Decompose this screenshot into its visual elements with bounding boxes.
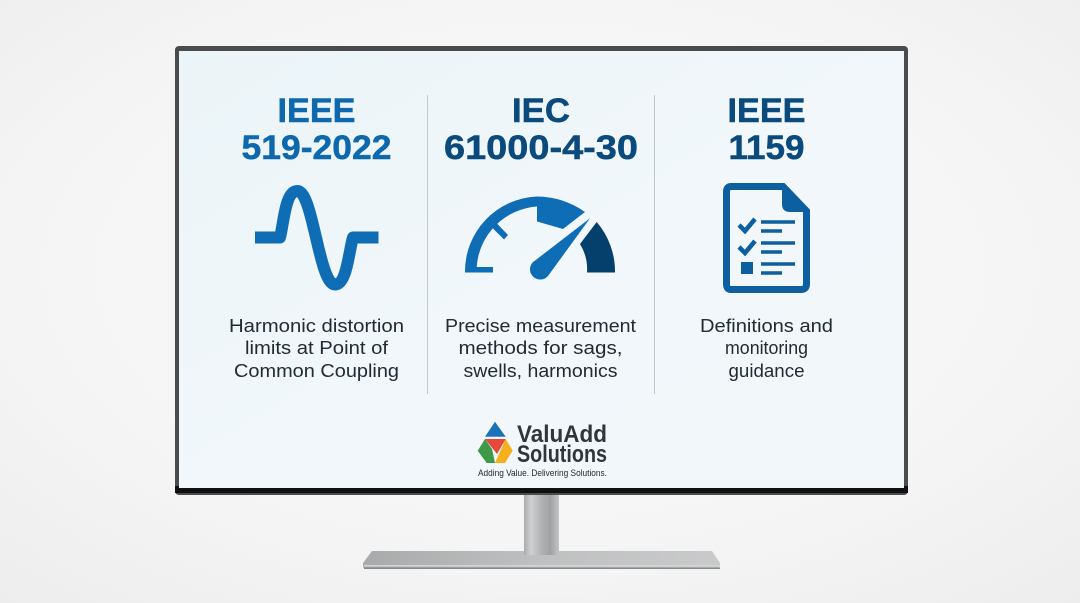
logo mark xyxy=(478,422,513,463)
description: measurement methods: methods for sags, xyxy=(458,337,622,358)
heading: IEC 61000-4-30: IEC xyxy=(512,92,570,130)
heading: IEC 61000-4-30: 61000-4-30 xyxy=(444,129,638,167)
heading: IEEE 519-2022: 519-2022 xyxy=(242,129,392,167)
description: harmonic distortion xyxy=(229,315,404,381)
description: measurement methods: swells, harmonics xyxy=(464,360,618,381)
column 1: IEEE 519-2022 xyxy=(229,92,404,381)
heading: IEC 61000-4-30 xyxy=(444,92,638,167)
column dividers xyxy=(427,95,655,394)
icon: gauge xyxy=(465,196,615,280)
logo wordmark: Solutions xyxy=(517,441,607,468)
logo: ValuAdd Solutions xyxy=(478,421,607,479)
description: definitions: monitoring xyxy=(725,337,808,358)
description: definitions xyxy=(700,315,833,381)
heading: IEEE 1159 xyxy=(728,92,806,167)
description: definitions: Definitions and xyxy=(700,315,833,336)
logo wordmark xyxy=(517,421,607,468)
description: harmonic distortion: limits at Point of xyxy=(245,337,389,358)
description: harmonic distortion: Common Coupling xyxy=(234,360,399,381)
column 3: IEEE 1159 xyxy=(700,92,833,381)
description: definitions: guidance xyxy=(728,360,804,381)
icon: checklist document xyxy=(726,184,809,290)
monitor bezel and screen xyxy=(175,46,908,495)
logo tagline: Adding Value. Delivering Solutions. xyxy=(478,468,607,479)
heading: IEEE 519-2022 xyxy=(242,92,392,167)
column 2: IEC 61000-4-30 xyxy=(444,92,638,381)
icon: harmonic waveform xyxy=(255,191,378,284)
logo wordmark: ValuAdd xyxy=(517,421,607,448)
heading: IEEE 1159: 1159 xyxy=(728,129,804,167)
description: harmonic distortion: Harmonic distortion xyxy=(229,315,404,336)
heading: IEEE 519-2022: IEEE xyxy=(278,92,356,130)
description: measurement methods xyxy=(445,315,636,381)
monitor stand xyxy=(363,494,720,569)
description: measurement methods: Precise measurement xyxy=(445,315,636,336)
heading: IEEE 1159: IEEE xyxy=(728,92,806,130)
